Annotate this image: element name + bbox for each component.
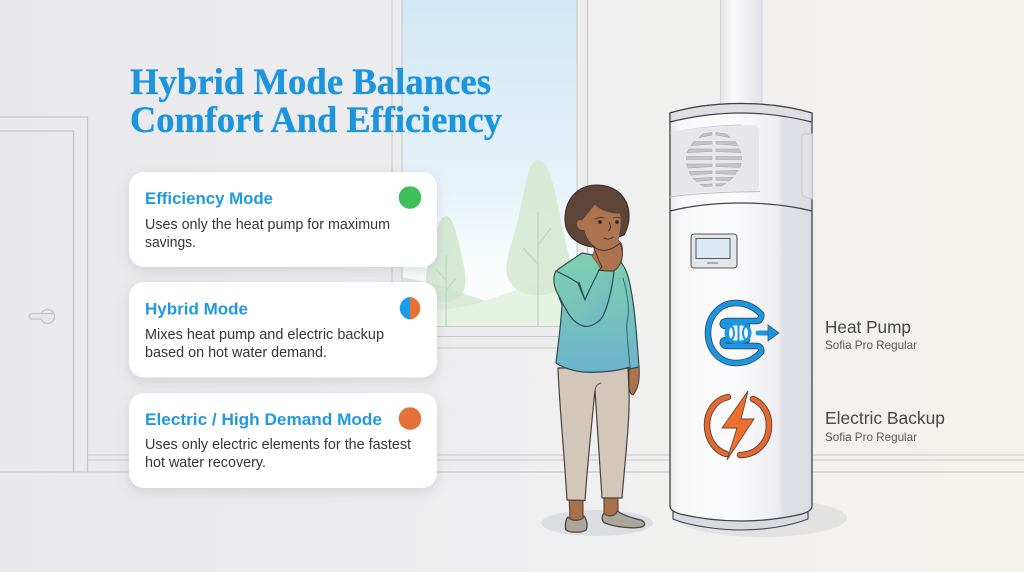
water heater bbox=[670, 0, 847, 537]
top cap bbox=[670, 104, 812, 122]
heading: efficiency mode: Efficiency Mode bbox=[145, 190, 273, 208]
person bbox=[541, 185, 653, 536]
title: Comfort And Efficiency bbox=[130, 99, 502, 140]
description: efficiency mode: savings. bbox=[145, 235, 196, 251]
icon: orange dot bbox=[399, 407, 421, 430]
tank body bbox=[670, 104, 812, 521]
description: electric high demand mode: Uses only electric elements for the fastest bbox=[145, 437, 411, 453]
hair bbox=[565, 185, 629, 247]
description: hybrid mode: Mixes heat pump and electric backup bbox=[145, 327, 384, 343]
panel: efficiency mode bbox=[129, 172, 437, 267]
label: electric backup: Electric Backup bbox=[825, 408, 945, 428]
heading: hybrid mode: Hybrid Mode bbox=[145, 300, 248, 318]
door bbox=[0, 117, 88, 472]
folded arm bbox=[554, 269, 614, 326]
flue pipe bbox=[720, 0, 762, 104]
base bbox=[673, 500, 808, 530]
panel: hybrid mode bbox=[129, 282, 437, 378]
icon: door handle bbox=[29, 309, 55, 323]
label: heat pump: Heat Pump bbox=[825, 317, 911, 337]
grille bbox=[686, 132, 742, 186]
icon: green dot bbox=[399, 186, 421, 209]
title bbox=[130, 61, 502, 140]
side panels bbox=[802, 134, 812, 199]
label: electric backup bbox=[825, 408, 945, 444]
legs and shoes bbox=[558, 368, 645, 532]
title: Hybrid Mode Balances bbox=[130, 61, 491, 102]
tree: large bbox=[506, 160, 570, 326]
tree: small bbox=[426, 216, 466, 326]
icon: heat pump bbox=[708, 303, 779, 363]
hills bbox=[402, 272, 577, 327]
label: heat pump: Sofia Pro Regular bbox=[825, 338, 917, 352]
label: electric backup: Sofia Pro Regular bbox=[825, 430, 917, 444]
description: efficiency mode: Uses only the heat pump for maximum bbox=[145, 217, 390, 233]
face and neck bbox=[577, 204, 623, 269]
far hand bbox=[629, 366, 639, 395]
floor shadow bbox=[677, 499, 847, 537]
lines around tank bbox=[670, 125, 760, 197]
description: hybrid mode: based on hot water demand. bbox=[145, 345, 327, 361]
window bbox=[392, 0, 588, 349]
torso bbox=[554, 253, 639, 372]
description: electric high demand mode: hot water recovery. bbox=[145, 455, 266, 471]
icon: half blue half orange dot bbox=[400, 297, 420, 320]
hand on chin bbox=[593, 243, 622, 271]
icon: electric backup bbox=[707, 391, 769, 460]
panel: electric high demand mode bbox=[129, 393, 437, 488]
label: heat pump bbox=[825, 317, 917, 352]
control panel bbox=[691, 234, 737, 268]
heading: electric high demand mode: Electric / High Demand Mode bbox=[145, 411, 382, 429]
